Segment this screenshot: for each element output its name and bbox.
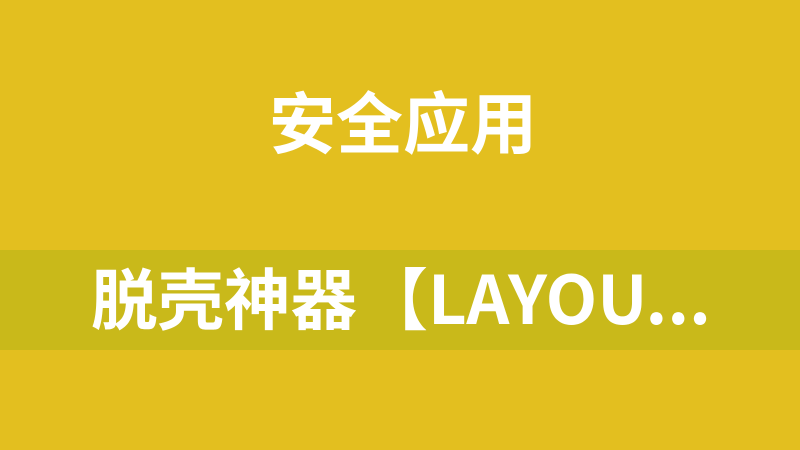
band [0,250,800,350]
band title: 脱壳神器 [91,248,357,344]
title: 安全应用 [269,71,537,168]
band title [91,247,711,344]
band title: 【LAYOU... [361,247,711,344]
